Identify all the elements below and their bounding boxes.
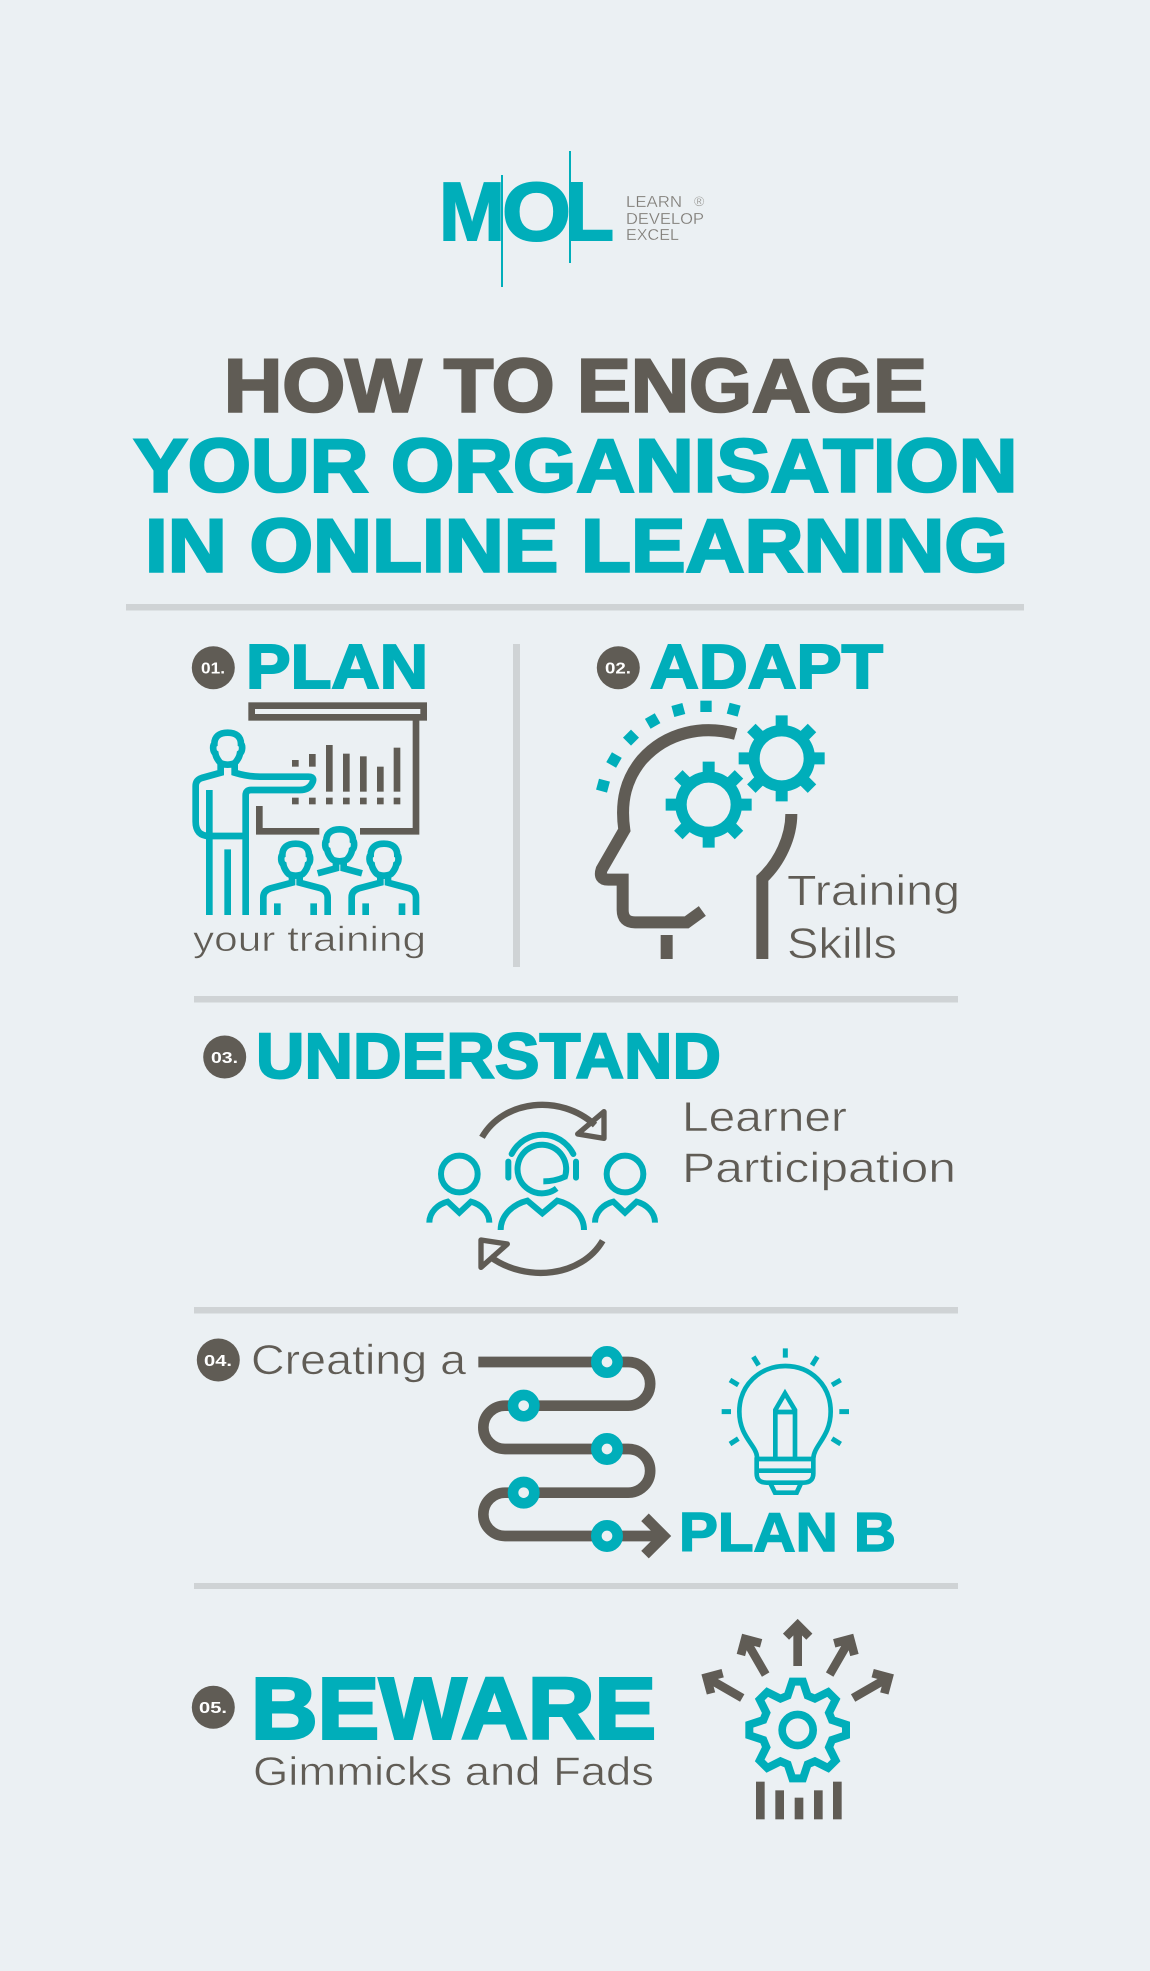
badge 01 bbox=[192, 646, 235, 689]
icon: people with headset and cycle arrows bbox=[429, 1105, 655, 1273]
logo: MOL: ® bbox=[694, 193, 705, 209]
logo: MOL: LEARN bbox=[626, 194, 682, 211]
logo: MOL: M bbox=[439, 165, 505, 258]
text: gimmicks and fads: Gimmicks and Fads bbox=[253, 1750, 654, 1794]
icon: presenter with chart and audience bbox=[196, 706, 424, 915]
text: training skills bbox=[787, 867, 960, 968]
heading: plan: PLAN bbox=[246, 632, 428, 702]
text: learner participation: Learner bbox=[682, 1093, 847, 1140]
heading: understand: UNDERSTAND bbox=[256, 1020, 721, 1092]
heading: adapt: ADAPT bbox=[650, 632, 883, 702]
panel: step 03 understand bbox=[203, 1020, 956, 1273]
logo: MOL: L bbox=[565, 165, 614, 258]
title: IN ONLINE LEARNING bbox=[145, 504, 1008, 588]
logo: MOL: EXCEL bbox=[626, 227, 679, 244]
badge 02: 02. bbox=[605, 660, 631, 678]
panel: step 01 plan bbox=[192, 632, 428, 959]
badge 05 bbox=[192, 1686, 235, 1729]
panel: step 04 plan b bbox=[197, 1336, 896, 1563]
text: your training: your training bbox=[193, 920, 426, 959]
text: creating a: Creating a bbox=[251, 1336, 467, 1383]
icon: light bulb with pencil bbox=[722, 1348, 849, 1493]
text: training skills: Training bbox=[787, 867, 960, 915]
text: learner participation bbox=[682, 1093, 956, 1191]
heading: beware: BEWARE bbox=[251, 1660, 656, 1758]
badge 04: 04. bbox=[204, 1353, 232, 1370]
badge 03: 03. bbox=[211, 1050, 238, 1067]
badge 03 bbox=[203, 1036, 246, 1078]
panel: step 02 adapt bbox=[596, 632, 960, 968]
icon: winding road with arrow bbox=[478, 1348, 849, 1555]
text: training skills: Skills bbox=[787, 920, 897, 968]
panel: step 05 beware bbox=[192, 1625, 894, 1819]
title: HOW TO ENGAGE bbox=[224, 344, 927, 428]
logo: MOL bbox=[439, 151, 705, 287]
logo: MOL: DEVELOP bbox=[626, 211, 704, 228]
title: YOUR ORGANISATION bbox=[134, 424, 1018, 508]
heading: plan b: PLAN B bbox=[679, 1502, 896, 1563]
logo: MOL: O bbox=[502, 165, 571, 258]
text: learner participation: Participation bbox=[682, 1144, 956, 1191]
badge 04 bbox=[197, 1338, 240, 1382]
icon: gear with arrows and bars bbox=[701, 1625, 894, 1819]
badge 01: 01. bbox=[201, 660, 225, 678]
title bbox=[134, 344, 1018, 588]
badge 02 bbox=[597, 646, 640, 689]
badge 05: 05. bbox=[199, 1700, 227, 1717]
icon: head with gears bbox=[596, 701, 825, 959]
